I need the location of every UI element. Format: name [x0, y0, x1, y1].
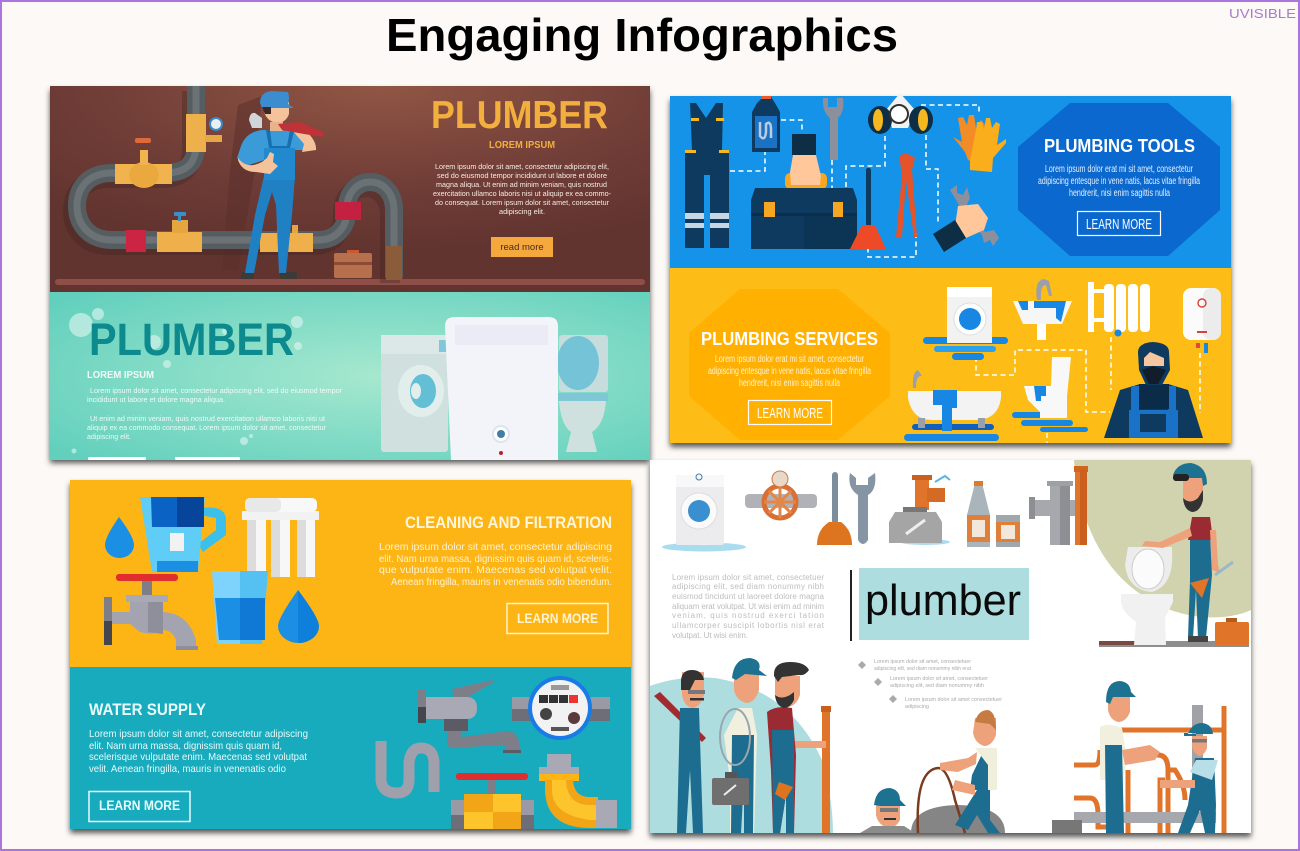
dashed connector lines yellow: [976, 337, 1200, 443]
character: man pulling hose: [911, 710, 1005, 833]
icon: water meter: [512, 676, 610, 740]
icon: small water drop: [105, 517, 134, 558]
paragraph teal: adipiscing elit.: [87, 432, 131, 441]
character: man in manhole: [860, 788, 915, 833]
icon: spanner: [849, 473, 875, 544]
illustration: toilet: [557, 335, 608, 452]
icon: faucet: [104, 574, 198, 650]
character: three plumbers: [654, 658, 831, 833]
icon: grey pipe junction: [1029, 481, 1084, 545]
illustration: toolbox: [334, 250, 372, 278]
paragraph: plumbing tools: adipiscing entesque in vene natis, lacus vitae fringilla: [1038, 176, 1200, 187]
paragraph: plumbing services: [708, 354, 871, 389]
bullet list: adipiscing elit, sed diam nonummy nibh erat: [874, 666, 971, 672]
subheading: teal LOREM IPSUM: LOREM IPSUM: [87, 369, 154, 381]
button: learn more water: [89, 792, 190, 822]
label: plumber: plumber: [865, 576, 1021, 625]
icon: bottle: [752, 96, 780, 152]
paragraph: cleaning: que vulputate enim. Maecenas sed volutpat velit.: [379, 564, 612, 576]
lower gold fittings: [157, 232, 202, 252]
icon: hand holding toolbox: [751, 134, 857, 249]
icon: hand with wrench: [933, 185, 999, 252]
icon: toolbox and leaking pipe: [889, 475, 950, 545]
paragraph: Lorem ipsum dolor sit amet, consectetur adipiscing elit,: [435, 162, 609, 171]
paragraph: water supply: elit. Nam urna massa, dignissim quis quam id,: [89, 740, 282, 752]
paragraph: left text: euismod tincidunt ut laoreet dolore magna: [672, 592, 825, 601]
paragraph: plumbing tools: [1038, 164, 1200, 199]
heading: teal PLUMBER: PLUMBER: [89, 314, 294, 365]
banner background: blue: [670, 96, 1231, 268]
paragraph: adipiscing elit.: [499, 207, 545, 216]
icon: cleaner bottle and can: [967, 481, 1020, 547]
plumber with pipe wrench: [654, 670, 706, 833]
paragraph: magna aliqua. Ut enim ad minim veniam, quis nostrud: [436, 180, 607, 189]
icon: overalls: [685, 103, 729, 248]
paragraph: plumbing services: hendrerit, nisi enim sagittis nulla: [739, 378, 840, 389]
icon: plumber portrait: [1104, 342, 1203, 438]
illustration: water heater: [445, 317, 558, 460]
paragraph: left text: aliquam erat volutpat. Ut wisi enim ad minim: [672, 602, 824, 611]
man shadow on the wall: [222, 96, 262, 270]
icon: gloves: [953, 115, 1006, 172]
paragraph: exercitation ullamco laboris nisi ut aliquip ex ea commo-: [433, 189, 611, 198]
gauge: [210, 118, 222, 130]
icon: plunger: [817, 472, 852, 545]
paragraph: left text: [672, 573, 825, 640]
heading: plumbing tools: PLUMBING TOOLS: [1044, 136, 1195, 156]
kneeling fitter: [1160, 723, 1218, 833]
plumber with plunger and pipe: [767, 662, 831, 833]
icon: radiator: [1088, 282, 1150, 336]
paragraph: water supply: velit. Aenean fringilla, mauris in venenatis odio: [89, 763, 286, 775]
illustration: pipeline: [73, 86, 402, 283]
icon: pliers: [896, 153, 917, 237]
paragraph: sed do eiusmod tempor incididunt ut labore et dolore: [437, 171, 607, 180]
button: read more: [491, 237, 553, 257]
illustration: washing machine: [381, 335, 448, 452]
paragraph: water supply: Lorem ipsum dolor sit amet, consectetur adipiscing: [89, 728, 308, 740]
button: learn more services: LEARN MORE: [757, 405, 823, 422]
paragraph teal: [87, 386, 342, 441]
icon: filter cartridges: [242, 498, 319, 577]
character: plumber with toilet: [1099, 463, 1249, 647]
paragraph: left text: adipiscing elit, sed diam nonummy nibh: [672, 582, 824, 591]
paragraph: cleaning: [379, 541, 612, 588]
bubbles: [69, 308, 303, 454]
icon: yellow elbow pipe: [539, 754, 617, 828]
heading: plumbing services: PLUMBING SERVICES: [701, 329, 878, 349]
button: learn more cleaning: LEARN MORE: [517, 611, 598, 626]
upper gold fittings: [186, 114, 206, 152]
paragraph teal: Ut enim ad minim veniam, quis nostrud exercitation ullamco laboris nisi ut: [90, 414, 326, 423]
floor strip: [55, 279, 645, 285]
paragraph: water supply: scelerisque vulputate enim. Maecenas sed volutpat: [89, 751, 307, 763]
icon: plunger: [850, 168, 886, 249]
cropped buttons: [88, 457, 240, 460]
paragraph: water supply: [89, 728, 308, 775]
icon: boiler: [1183, 288, 1221, 353]
character: two pipe fitters: [1052, 681, 1224, 833]
button: learn more: LEARN MORE: [1086, 216, 1152, 233]
banner background: teal: [50, 292, 650, 460]
icon: wall tap: [418, 680, 521, 753]
banner background: teal blue: [70, 667, 631, 829]
paragraph: cleaning: Lorem ipsum dolor sit amet, consectetur adipiscing: [379, 541, 612, 553]
paragraph: left text: volutpat. Ut wisi enim.: [672, 631, 748, 640]
olive background shape: [1074, 460, 1251, 617]
button: read more: read more: [500, 242, 544, 253]
bullet list: Lorem ipsum dolor sit amet consectetuer: [905, 697, 1002, 703]
heading: PLUMBER: PLUMBER: [431, 94, 608, 137]
panel background: [650, 460, 1251, 833]
bullet list: Lorem ipsum dolor sit amet, consectetuer: [874, 659, 971, 665]
icon: respirator mask: [868, 93, 933, 134]
banner background: yellow: [70, 480, 631, 667]
banner background: brown wall: [50, 86, 650, 292]
divider bar: [850, 570, 852, 641]
banner background: yellow: [670, 268, 1231, 443]
button: learn more: [1078, 212, 1160, 236]
paragraph: plumbing services: Lorem ipsum dolor erat mi sit amet, consectetur: [715, 354, 864, 365]
bullet list: [858, 659, 1002, 710]
rust: [386, 246, 402, 280]
teal background shape: [650, 677, 833, 833]
icon: red handle valve: [451, 773, 534, 829]
paragraph: do consequat. Lorem ipsum dolor sit amet, consectetur: [435, 198, 609, 207]
heading: cleaning and filtration: CLEANING AND FILTRATION: [405, 513, 612, 532]
icon: water glass: [212, 571, 268, 644]
paragraph: plumbing tools: Lorem ipsum dolor erat mi sit amet, consectetur: [1045, 164, 1193, 175]
paragraph: cleaning: elit. Nam urna massa, dignissim quis quam id, sceleris-: [379, 553, 612, 565]
icon: orange pipe: [1074, 466, 1088, 545]
icon: bathtub: [904, 370, 1001, 441]
icon: leaking washing machine: [923, 287, 1008, 360]
paragraph: left text: Lorem ipsum dolor sit amet, consectetuer: [672, 573, 824, 582]
subheading: LOREM IPSUM: LOREM IPSUM: [489, 139, 555, 151]
icon: filter jug: [140, 497, 226, 572]
label: plumber: [859, 568, 1029, 640]
dashed connector lines blue: [730, 105, 979, 257]
title: Engaging Infographics: [386, 9, 898, 61]
panel: plumber characters: [650, 460, 1251, 837]
paragraph teal: Lorem ipsum dolor sit amet, consectetur adipiscing elit, sed do eiusmod tempor: [90, 386, 342, 395]
button: learn more services: [748, 400, 832, 424]
icon: toilet: [1012, 357, 1088, 432]
icon: wrench: [823, 98, 843, 160]
panel: plumbing tools and services: [670, 93, 1231, 447]
panel: plumber brown and teal banners: [50, 86, 650, 463]
button: learn more water: LEARN MORE: [99, 798, 180, 813]
plumber with toolbox: [712, 658, 767, 833]
paragraph teal: aliquip ex ea commodo consequat. Lorem ipsum dolor sit amet, consectetur: [87, 423, 326, 432]
bullet list: adipiscing: [905, 704, 929, 710]
paragraph: left text: ullamcorper suscipit lobortis nisl erat: [672, 621, 825, 630]
red clamps: [126, 230, 146, 252]
paragraph: plumbing services: adipiscing entesque in vene natis, lacus vitae fringilla: [708, 366, 871, 377]
standing fitter: [1100, 681, 1160, 833]
pipework: [1074, 706, 1224, 833]
heading: water supply: WATER SUPPLY: [89, 700, 207, 719]
octagon panel: plumbing services: [689, 289, 890, 440]
icon: washing machine: [662, 474, 746, 552]
icon: big water drop: [278, 590, 319, 643]
octagon panel: plumbing tools: [1018, 103, 1220, 256]
paragraph: plumbing tools: hendrerit, nisi enim sagittis nulla: [1069, 188, 1170, 199]
icon: leaking sink: [1013, 279, 1072, 340]
bullet list: Lorem ipsum dolor sit amet, consectetuer: [890, 676, 988, 682]
paragraph teal: incididunt ut labore et dolore magna aliqua.: [87, 395, 225, 404]
icon: drain trap pipe: [381, 741, 434, 793]
bullet list: adipiscing elit, sed diam nonummy nibh: [890, 683, 984, 689]
icon: pipe valve: [745, 471, 817, 518]
logo: UVISIBLE: UVISIBLE: [1229, 6, 1296, 21]
button: learn more cleaning: [507, 604, 608, 634]
illustration: plumber with wrench: [237, 91, 324, 279]
paragraph: [433, 162, 611, 216]
panel: cleaning and water supply: [70, 480, 631, 833]
paragraph: cleaning: Aenean fringilla, mauris in venenatis odio bibendum.: [391, 576, 612, 588]
paragraph: left text: veniam, quis nostrud exerci tation: [672, 611, 824, 620]
